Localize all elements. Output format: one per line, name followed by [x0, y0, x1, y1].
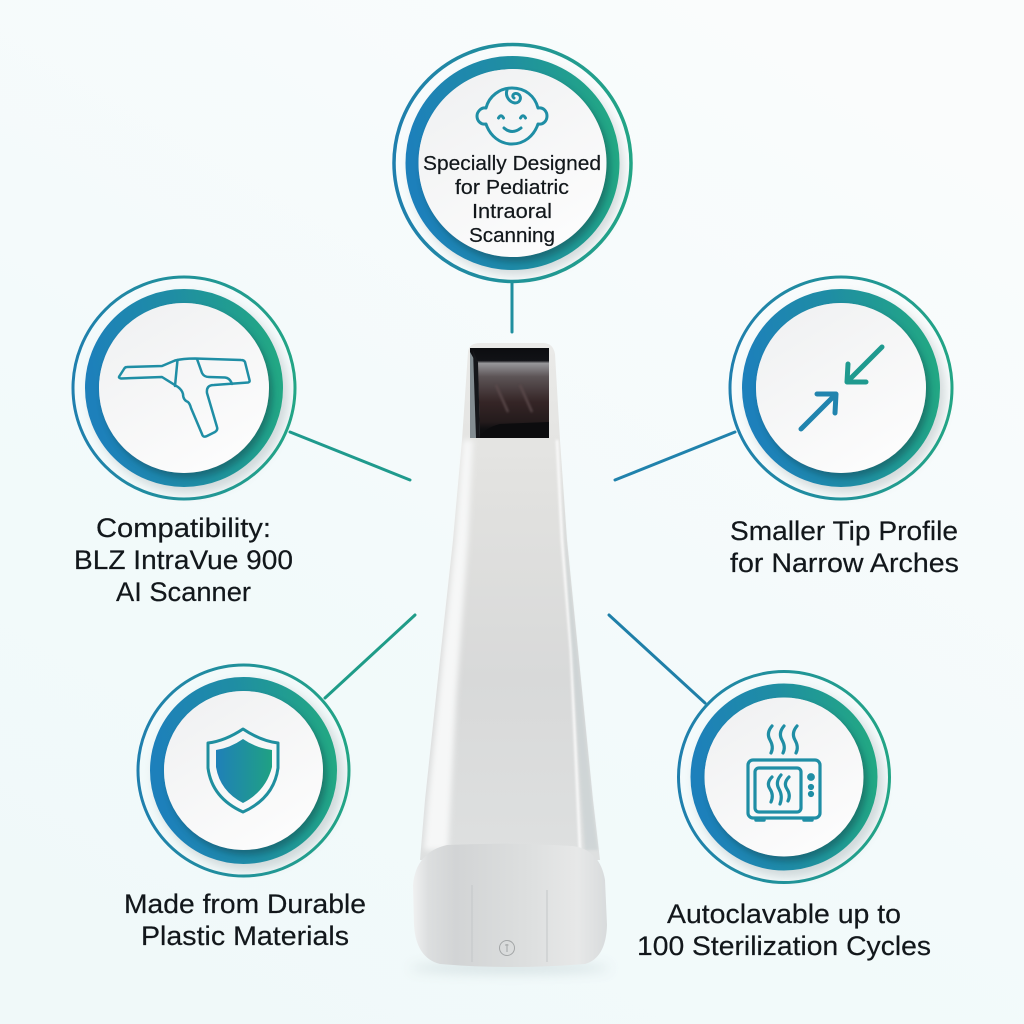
- label: compatibility: AI Scanner: [116, 577, 251, 607]
- feature: compatibility: [73, 277, 295, 499]
- icon: inward arrows: [801, 347, 882, 429]
- label: pediatric: Intraoral: [472, 200, 552, 223]
- tip body: [420, 343, 600, 860]
- icon: baby face: [477, 88, 547, 144]
- label: smaller tip: [730, 516, 959, 578]
- icon: steaming microwave: [748, 726, 820, 820]
- scan window: [470, 348, 549, 438]
- body highlights: [424, 440, 598, 850]
- label: smaller tip: Smaller Tip Profile: [730, 516, 958, 546]
- icon: shield: [208, 729, 278, 812]
- icon: scanner gun: [119, 358, 250, 437]
- label: compatibility: [74, 513, 293, 607]
- label: autoclavable: [637, 899, 931, 961]
- feature: smaller tip: [730, 277, 952, 499]
- flared foot: [413, 844, 607, 967]
- label: durable plastic: Made from Durable: [124, 889, 366, 919]
- label: autoclavable: 100 Sterilization Cycles: [637, 931, 931, 961]
- label: durable plastic: [124, 889, 366, 951]
- label: compatibility: Compatibility:: [96, 513, 271, 543]
- logo mark: [500, 940, 514, 956]
- label: pediatric: Scanning: [469, 224, 555, 247]
- feature: durable plastic: [138, 665, 349, 876]
- label: compatibility: BLZ IntraVue 900: [74, 545, 293, 575]
- feature: autoclavable: [678, 672, 890, 882]
- label: durable plastic: Plastic Materials: [141, 921, 349, 951]
- feature: pediatric: [394, 44, 631, 282]
- floor shadow: [410, 963, 610, 973]
- label: smaller tip: for Narrow Arches: [730, 548, 959, 578]
- product: scanner tip: [410, 343, 610, 973]
- connector lines: [290, 283, 735, 703]
- label: pediatric: for Pediatric: [455, 176, 569, 199]
- label: pediatric: [423, 152, 601, 247]
- label: pediatric: Specially Designed: [423, 152, 601, 175]
- label: autoclavable: Autoclavable up to: [667, 899, 901, 929]
